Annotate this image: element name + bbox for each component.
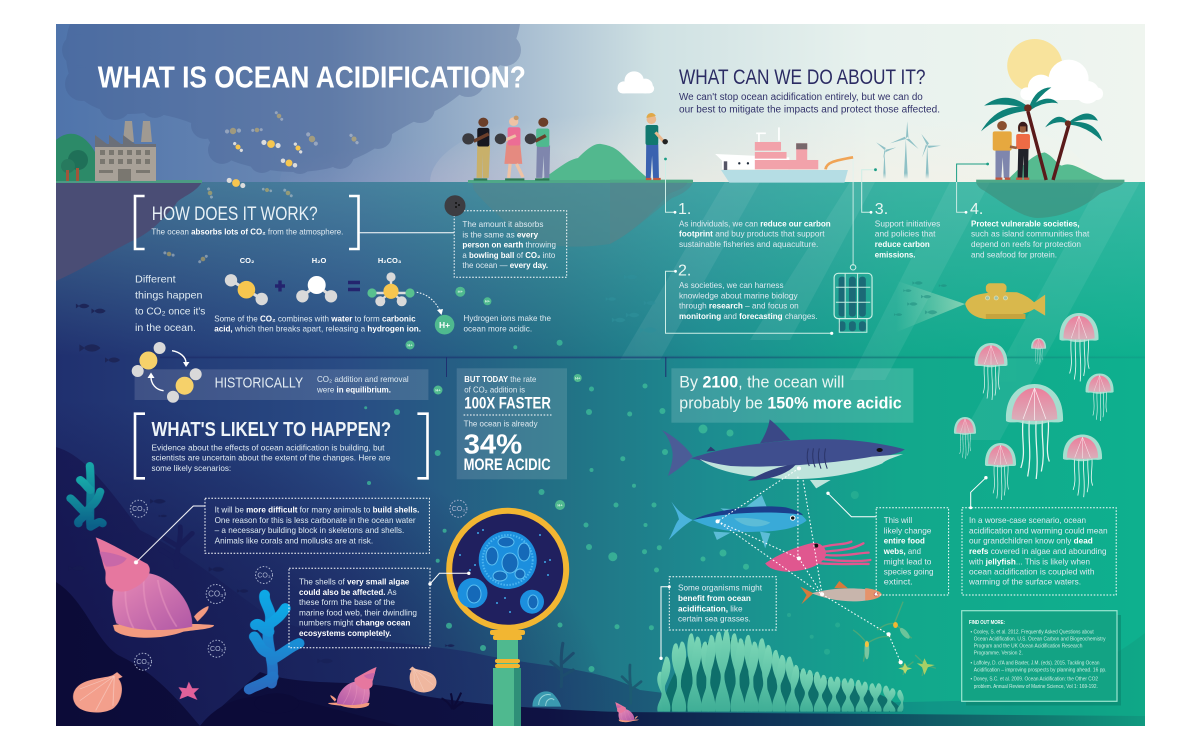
subtitle [679,92,940,115]
panel: by 2100: probably be 150% more acidic [679,394,902,412]
plankton [853,602,936,676]
title: WHAT IS OCEAN ACIDIFICATION? [98,60,526,94]
hydrogen caption: Hydrogen ions make the [464,314,551,323]
background: ocean [56,182,1145,726]
callout: food webs: This will [884,516,912,525]
callout: sea grasses: acidification, like [678,604,743,613]
callout: shells: One reason for this is less carbonate in the ocean water [215,516,416,525]
step 4: such as island communities that [971,230,1090,239]
shark [662,419,905,488]
plus sign [275,280,285,292]
text: different things happen: things happen [135,290,203,302]
panel: how does it work [135,196,454,249]
heading: what can we do: WHAT CAN WE DO ABOUT IT? [679,66,926,89]
callout: food webs: likely change [884,526,932,535]
text: different things happen [135,273,205,334]
dashed arrow [417,292,443,315]
callout: bowling ball: the ocean — every day. [462,261,548,270]
subtitle: We can't stop ocean acidification entirely, but we can do [679,92,923,103]
CO3 circles: CO₃ [136,659,150,666]
food web (drawn in a scaled local space) [615,419,936,722]
step 2: 2. [678,263,691,280]
molecule: H2CO3 [367,256,415,306]
text: different things happen: in the ocean. [135,322,196,334]
step 3: Support initiatives [875,219,940,228]
callout: algae: numbers might change ocean [299,619,410,628]
callout: worst case: our grandchildren know only dead [969,537,1093,546]
callout: algae: these form the base of the [299,598,395,607]
panel: but today [457,368,567,479]
factory [95,121,156,181]
island [468,144,693,247]
callout: bowling ball: person on earth throwing [462,241,556,250]
molecule: H2CO3: H₂CO₃ [378,256,402,265]
callout: algae: could also be affected. As [299,588,397,597]
callout: algae: The shells of very small algae [299,578,410,587]
leader [134,506,205,564]
black grass [441,693,464,709]
island with palms and couple [976,87,1124,218]
scallop shell [73,672,123,713]
bubbles and hydrogen ions: H+ [435,387,441,392]
bubbles and hydrogen ions: H+ [458,289,464,294]
step 1: footprint and buy products that support [679,230,825,239]
callout: food webs: species going [884,568,934,577]
callout: bowling ball: a bowling ball of CO₂ into [462,251,556,260]
sea life left (drawn in a scaled local space) [68,466,573,713]
callout: bowling ball: is the same as every [462,230,539,239]
dark fish [68,499,455,663]
panel: by 2100: By 2100, the ocean will [679,374,844,392]
subtitle: our best to mitigate the impacts and protect those affected. [679,104,940,115]
clouds and sun [618,39,1103,104]
CO3 circles: CO₃ [208,590,223,598]
handle [490,630,525,726]
hill and trees [56,134,99,181]
background: sky [56,24,1145,277]
step 4: Protect vulnerable societies, [971,219,1080,228]
icon: bowling ball [444,195,466,216]
step 1: sustainable fisheries and aquaculture. [679,240,818,249]
panel: find out more: problem. Annual Review of Marine Science, Vol 1: 169-192. [974,684,1098,690]
step 3: and policies that [875,230,936,239]
panel: what's likely to happen: some likely scenarios: [152,464,231,473]
equilibrium molecules [132,342,202,403]
panel: historically [132,342,428,403]
panel: but today: BUT TODAY the rate [464,375,537,384]
hydrogen caption [464,314,551,334]
step 4 [957,163,1090,259]
panel: find out more: • Doney, S.C. et al. 2009. Ocean Acidification: the Other CO2 [970,677,1098,683]
connector [360,232,454,234]
right side surface scene [610,39,1124,332]
callout: algae: marine food web, their dwindling [299,608,417,617]
bracket frame [135,196,358,249]
three people [462,116,550,180]
jellyfish group [954,313,1114,500]
smoke cloud [62,24,521,174]
molecule: H2O: H₂O [312,256,326,265]
magnifying glass with algae [428,511,566,726]
text: different things happen: Different [135,273,176,285]
callout: worst case: ocean acidification is coupled with [969,568,1095,577]
leader [428,572,470,586]
timeline [160,356,1145,377]
molecule: CO2: CO₂ [240,256,254,265]
callout: algae [289,568,430,648]
panel: but today: 34% [464,428,522,459]
callout: bowling ball: The amount it absorbs [462,220,543,229]
panel: by 2100 [671,368,913,423]
step 2: through research – and focus on [679,302,799,311]
equation caption: Some of the CO₂ combines with water to form carbonic [214,314,416,323]
panel: find out more: Ocean Acidification. U.S. Ocean Carbon and Biogeochemistry [974,636,1106,642]
icon: hydrogen ion [435,315,454,335]
bubbles and hydrogen ions: H+ [557,502,563,507]
food web dotted lines [718,468,901,662]
molecule: H2O [296,256,337,302]
step 2: As societies, we can harness [679,281,784,290]
panel: find out more: • Laffoley, D. d'A and Baxter, J.M. (eds). 2015. Tackling Ocean [970,660,1100,666]
bubbles and hydrogen ions: H+ [575,375,581,380]
small snail [328,667,377,708]
step 2: knowledge about marine biology [679,291,799,300]
silhouette coral [161,527,192,567]
panel: what's likely to happen: WHAT'S LIKELY TO HAPPEN? [152,419,391,441]
callout: food webs: entire food [884,537,925,546]
CO3 circles: CO₃ [257,572,271,580]
panel: find out more: Acidification – improving prospects by planning ahead. 16 pp. [974,667,1106,673]
panel: historically: CO₂ addition and removal [317,375,409,384]
molecule: CO2 [225,256,268,305]
right island with bowling-ball people [462,116,693,247]
panel: what's likely to happen [135,414,428,478]
step 3: reduce carbon [875,240,930,249]
panel: but today: The ocean is already [464,420,538,429]
research ship [715,127,853,266]
callout: sea grasses: certain sea grasses. [678,614,751,623]
panel: what's likely to happen: scientists are uncertain about the extent of the changes. Here are [152,454,391,463]
wind turbines [876,121,941,179]
panel: find out more: Program and the UK Ocean Acidification Research [974,643,1083,649]
step 4: 4. [970,201,983,218]
bubbles and hydrogen ions: H+ [485,299,491,304]
icon: hydrogen ion: H+ [439,320,450,330]
callout: shells: It will be more difficult for many animals to build shells. [215,506,419,515]
step 1: 1. [678,201,691,218]
callout: worst case: with jellyfish... This is likely when [968,557,1090,566]
algae cells [458,529,551,614]
panel: find out more [962,611,1121,706]
shell [409,667,437,692]
step 1 [664,158,831,249]
panel: historically: were in equilibrium. [316,385,391,394]
chemical equation [214,256,551,335]
coral: blue [249,595,299,689]
step 2 [666,263,833,335]
CO3 circles: CO₃ [452,506,465,513]
callout: sea grasses [659,577,776,660]
small fish [800,581,882,604]
big snail [96,537,214,638]
CO3 circles: CO₃ [132,506,146,513]
coral: teal [70,466,103,527]
panel: find out more: • Cooley, S. et al. 2012. Frequently Asked Questions about [970,629,1094,635]
callout: bowling ball [444,195,567,277]
panel: historically: HISTORICALLY [215,374,303,391]
callout: worst case: acidification and warming could mean [969,526,1108,535]
panel: but today: MORE ACIDIC [464,456,551,474]
bubbles and hydrogen ions [364,287,859,672]
squid [765,542,870,572]
CO2 molecules rising [163,111,361,265]
equals sign [348,282,360,290]
callout: sea grasses: benefit from ocean [678,594,751,603]
callout: worst case [962,476,1116,595]
step 3: 3. [875,201,888,218]
panel: find out more: Programme. Version 2. [974,651,1023,657]
step 1: As individuals, we can reduce our carbon [679,219,831,228]
bubbles and hydrogen ions: H+ [407,342,413,347]
fish school left [76,275,657,363]
step 2: monitoring and forecasting changes. [679,312,818,321]
seabed layers [56,447,1145,726]
callout: food webs: webs, and [883,547,921,556]
step 3 [862,168,940,259]
callout: worst case: reefs covered in algae and abounding [969,547,1107,556]
callout: sea grasses: Some organisms might [678,584,763,593]
submarine with light beam [894,281,1045,332]
callout: worst case: In a worse-case scenario, ocean [969,516,1086,525]
callout: worst case: warming of the surface waters. [968,578,1081,587]
callout: shells [205,498,429,553]
equation caption [214,314,421,334]
callout: food webs: extinct. [884,578,913,587]
lens [449,511,566,628]
hill and person [610,113,693,244]
CO3 circles: CO₃ [210,646,224,653]
starfish [178,682,199,700]
panel: but today: of CO₂ addition is [464,385,525,394]
dead coral [551,643,573,687]
step 3: emissions. [875,250,916,259]
hydrogen caption: ocean more acidic. [464,325,532,334]
intro text: The ocean absorbs lots of CO₂ from the atmosphere. [151,228,343,237]
step 4: depend on reefs for protection [971,240,1081,249]
left land [56,134,202,281]
text: different things happen: to CO₂ once it's [135,306,205,318]
sea grass [657,630,904,712]
heading: what can we do [679,66,940,115]
CO3 circles [130,500,467,670]
step labels and leaders [664,158,1090,335]
tuna [669,495,807,548]
callout: food webs: might lead to [884,557,932,566]
step 4: and seafood for protein. [971,250,1057,259]
tiny snail and coral [615,665,641,722]
heading: HOW DOES IT WORK? [152,204,318,225]
callout: algae: ecosystems completely. [299,629,391,638]
blue shell [532,691,561,707]
equation caption: acid, which then breaks apart, releasing a hydrogen ion. [214,325,421,334]
callout: shells: – a necessary building block in skeletons and shells. [215,526,404,535]
panel: what's likely to happen: Evidence about the effects of ocean acidification is building, but [152,443,385,452]
panel: find out more: FIND OUT MORE: [969,620,1005,626]
light beams [620,182,1140,440]
sampling cage [834,265,872,332]
callout: food webs [826,492,949,595]
panel: but today: 100X FASTER [464,394,551,412]
callout: shells: Animals like corals and mollusks are at risk. [215,536,373,545]
